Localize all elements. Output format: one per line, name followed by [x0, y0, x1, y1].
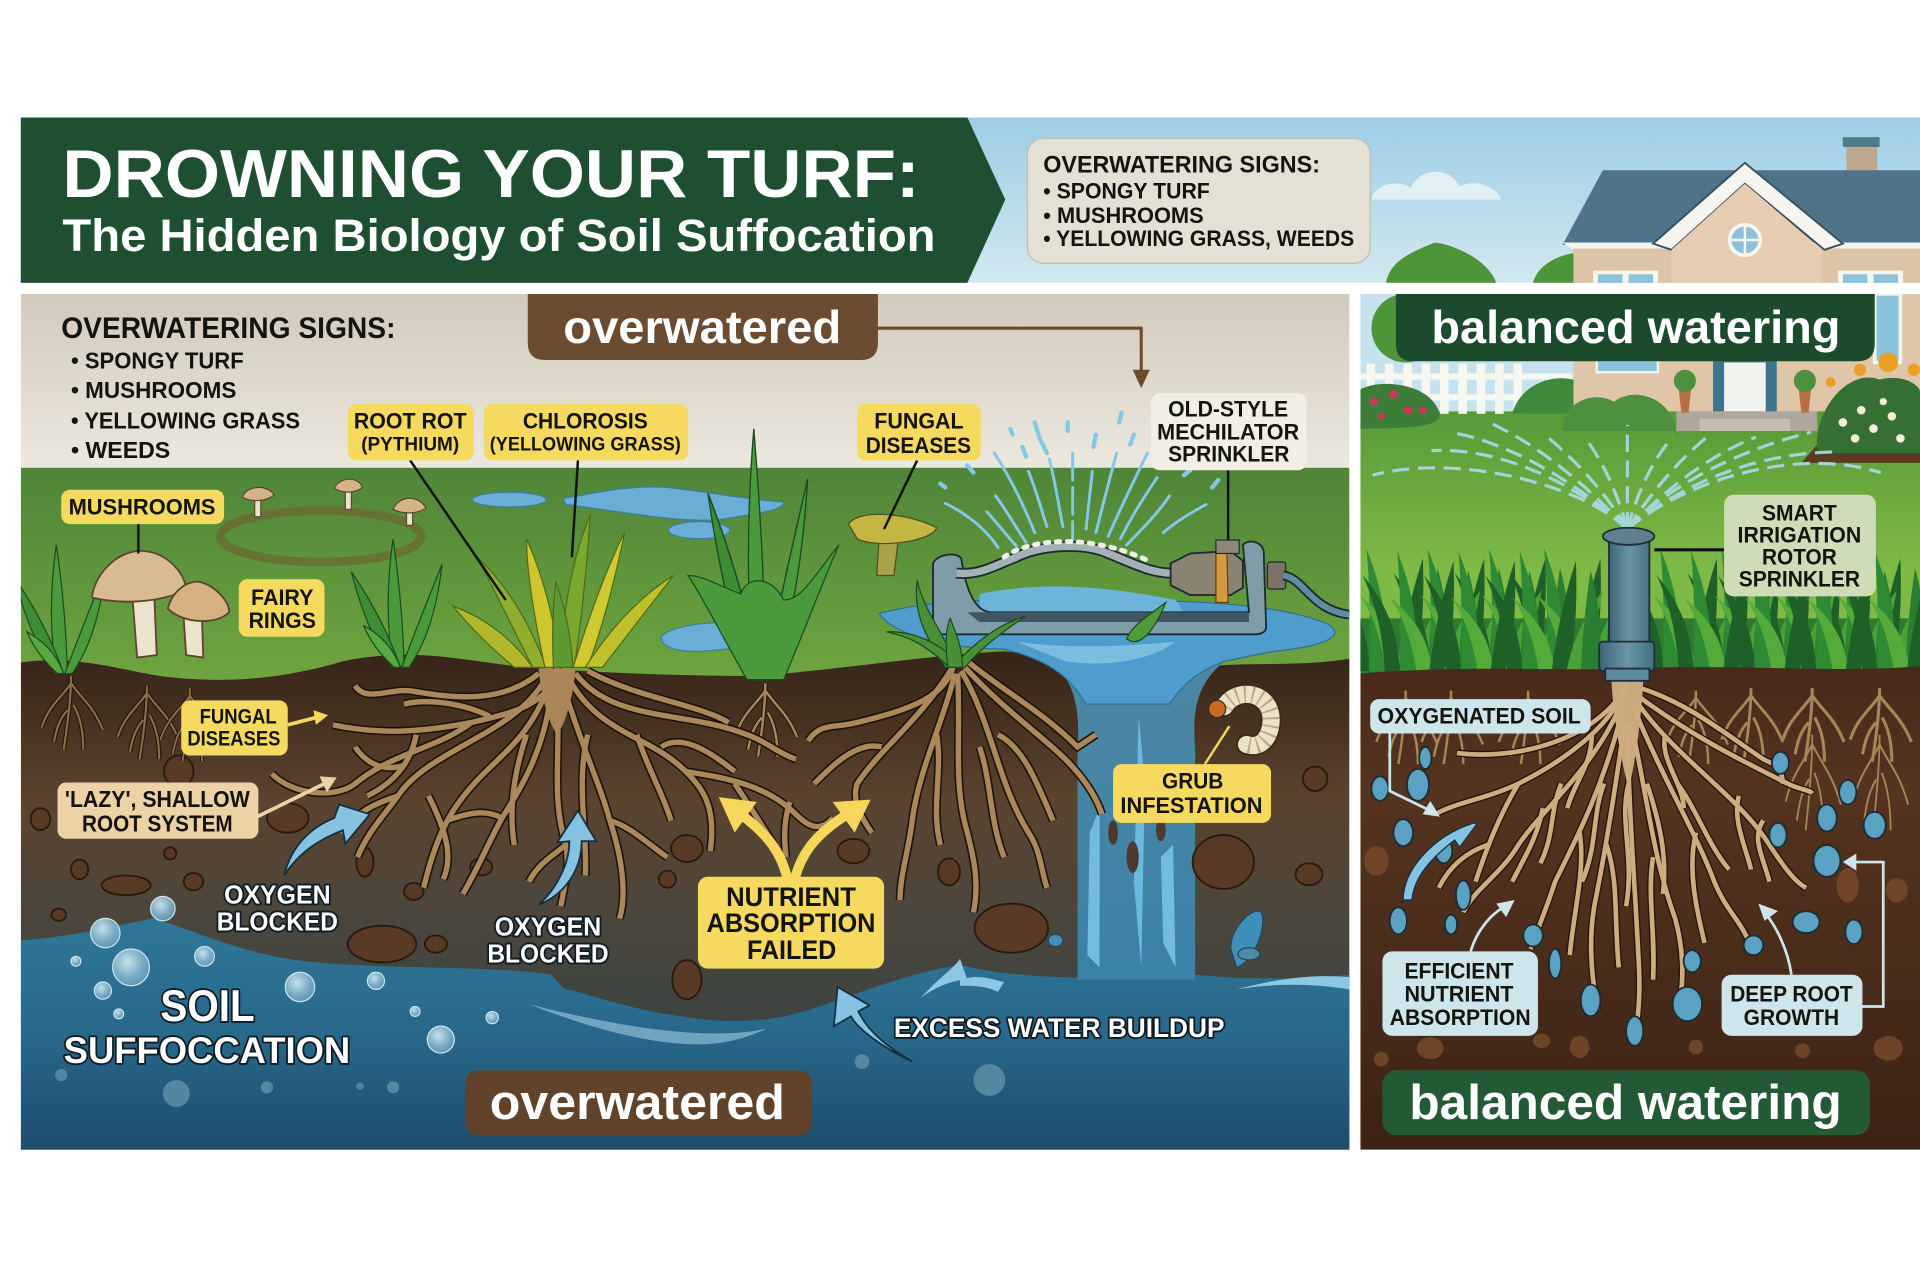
bubbles — [71, 896, 498, 1053]
panel: overwatered scene — [15, 294, 1349, 1150]
label: fairy rings — [239, 579, 324, 637]
arrow: fungal diseases — [288, 710, 328, 725]
arrow: oxygen blocked left — [284, 804, 370, 876]
icon: oscillating sprinkler — [933, 540, 1349, 642]
label: efficient nutrient absorption: NUTRIENT — [1404, 982, 1514, 1007]
title: DROWNING YOUR TURF: — [62, 137, 920, 212]
label: grub infestation — [1113, 764, 1271, 823]
oxygenated soil — [1360, 666, 1920, 1150]
label: soil suffocation: SUFFOCCATION — [64, 1030, 350, 1071]
label: lazy shallow root system — [58, 782, 258, 839]
label: efficient nutrient absorption: EFFICIENT — [1404, 958, 1514, 983]
label: grub infestation: GRUB — [1162, 769, 1223, 794]
panel: header — [21, 118, 1920, 285]
callout: overwatering signs: • MUSHROOMS — [1043, 203, 1204, 228]
lush grass — [1332, 549, 1920, 673]
arrow: overwatered to sprinkler — [878, 328, 1150, 388]
label: fungal diseases top: DISEASES — [866, 433, 971, 458]
callout: overwatering signs: • YELLOWING GRASS, WEEDS — [1043, 226, 1354, 251]
fairy ring — [220, 511, 421, 562]
panel: balanced watering scene — [1332, 294, 1920, 1150]
callout: overwatering signs: • SPONGY TURF — [1043, 178, 1210, 203]
arrow: oxygen flow — [1403, 823, 1477, 900]
leader line: smart sprinkler — [1654, 549, 1724, 551]
deep root system — [1435, 681, 1812, 1022]
icon: fungal mushroom — [849, 514, 937, 576]
callout: overwatering signs: OVERWATERING SIGNS: — [1043, 152, 1320, 179]
house lower floor — [1371, 294, 1920, 416]
arrow: nutrient absorption — [1471, 900, 1515, 951]
grass plants — [15, 429, 839, 680]
water pockets in soil — [1048, 911, 1263, 967]
side roots — [1376, 688, 1911, 830]
label: oxygen blocked center — [487, 914, 609, 968]
label: fungal diseases lower: FUNGAL — [200, 706, 277, 729]
label: oxygenated soil: OXYGENATED SOIL — [1378, 704, 1581, 729]
icon: rotor sprinkler — [1599, 528, 1654, 681]
brown stones — [1364, 846, 1908, 1067]
garden bushes — [1360, 370, 1817, 431]
label: grub infestation: INFESTATION — [1120, 793, 1262, 818]
label: oxygen blocked left: OXYGEN — [224, 882, 331, 910]
leader lines — [138, 460, 1228, 600]
title banner — [21, 118, 1005, 283]
label: old-style sprinkler — [1151, 393, 1307, 470]
label: deep root growth: GROWTH — [1744, 1005, 1839, 1030]
callout: nutrient absorption failed: ABSORPTION — [707, 908, 876, 938]
label: efficient nutrient absorption — [1382, 951, 1538, 1036]
callout: overwatering signs — [1027, 138, 1370, 263]
label: chlorosis — [484, 404, 688, 460]
label: oxygenated soil — [1370, 699, 1591, 733]
standing water around sprinkler — [879, 587, 1335, 704]
label: soil suffocation — [64, 982, 350, 1071]
label: old-style sprinkler: OLD-STYLE — [1168, 396, 1288, 421]
arrow: oxygen blocked center — [539, 811, 596, 905]
label: chlorosis: (YELLOWING GRASS) — [490, 434, 681, 456]
icon: large mushrooms — [92, 551, 229, 658]
label: mushrooms: MUSHROOMS — [69, 494, 216, 519]
heading tag: overwatered bottom: overwatered — [490, 1076, 785, 1130]
label: smart irrigation rotor sprinkler: SPRINKLER — [1739, 567, 1860, 592]
surface puddles — [473, 487, 785, 651]
label: smart irrigation rotor sprinkler: ROTOR — [1762, 544, 1837, 569]
heading tag: balanced watering top — [1396, 294, 1875, 361]
label: root rot: ROOT ROT — [354, 409, 467, 434]
central root system — [272, 667, 833, 918]
label: root rot: (PYTHIUM) — [361, 434, 459, 456]
soil — [21, 651, 1349, 1150]
foreground plant by sprinkler — [887, 580, 1026, 667]
label: lazy shallow root system: 'LAZY', SHALLOW — [65, 786, 250, 812]
label: deep root growth — [1722, 975, 1862, 1036]
label block: overwatering signs — [61, 312, 396, 463]
water pockets — [1371, 747, 1886, 1046]
label: fungal diseases lower — [181, 700, 288, 756]
label block: overwatering signs: • YELLOWING GRASS — [71, 408, 300, 434]
subtitle: The Hidden Biology of Soil Suffocation — [62, 210, 936, 261]
label block: overwatering signs: • WEEDS — [71, 437, 170, 463]
label: old-style sprinkler: MECHILATOR — [1157, 420, 1299, 445]
label: deep root growth: DEEP ROOT — [1730, 982, 1853, 1007]
label block: overwatering signs: OVERWATERING SIGNS: — [61, 312, 396, 345]
arrow: oxygenated soil — [1390, 733, 1440, 817]
label: fungal diseases top — [857, 404, 981, 460]
white fence — [1360, 364, 1572, 414]
waterfall into soil — [1067, 662, 1224, 980]
arrow: excess water — [834, 987, 912, 1062]
infographic canvas — [20, 118, 1920, 1150]
arrow: deep roots — [1758, 904, 1791, 975]
heading tag: balanced watering top: balanced watering — [1431, 301, 1840, 353]
label: excess water buildup: EXCESS WATER BUILDUP — [894, 1013, 1225, 1043]
heading tag: overwatered top: overwatered — [563, 301, 841, 353]
callout: nutrient absorption failed: FAILED — [747, 935, 836, 965]
shallow root system: left plants — [42, 676, 797, 762]
soil stones — [31, 756, 1327, 999]
lawn — [1360, 411, 1920, 673]
label: fairy rings: RINGS — [249, 608, 316, 633]
label: oxygen blocked left — [217, 882, 338, 937]
rotor spray — [1373, 421, 1881, 529]
label: mushrooms — [61, 490, 224, 524]
arrow: deep root to water — [1843, 853, 1883, 1007]
underground water layer — [21, 918, 1349, 1150]
label: smart irrigation rotor sprinkler — [1724, 495, 1876, 596]
label: lazy shallow root system: ROOT SYSTEM — [82, 810, 233, 836]
label: fairy rings: FAIRY — [251, 585, 314, 610]
icon: small mushrooms — [242, 479, 426, 525]
sprinkler water spray — [940, 413, 1218, 547]
label: smart irrigation rotor sprinkler: IRRIGATION — [1738, 522, 1861, 547]
label: fungal diseases top: FUNGAL — [874, 409, 964, 434]
arrow: lazy roots — [257, 776, 337, 817]
heading tag: overwatered bottom — [465, 1070, 812, 1135]
label: fungal diseases lower: DISEASES — [187, 728, 281, 751]
label: soil suffocation: SOIL — [160, 982, 255, 1031]
heading tag: overwatered top — [528, 294, 878, 360]
label block: overwatering signs: • MUSHROOMS — [71, 377, 236, 403]
label: chlorosis: CHLOROSIS — [523, 409, 648, 434]
label block: overwatering signs: • SPONGY TURF — [71, 348, 244, 374]
sprinkler-side root system — [808, 655, 1102, 912]
callout: nutrient absorption failed: NUTRIENT — [726, 882, 856, 912]
arrows: nutrients failing — [719, 797, 871, 879]
label: smart irrigation rotor sprinkler: SMART — [1762, 500, 1837, 525]
flower bed — [1801, 353, 1920, 463]
sky and house scene — [967, 118, 1920, 285]
icon: white grub — [1205, 694, 1271, 764]
label: oxygen blocked left: BLOCKED — [217, 909, 338, 937]
heading tag: balanced watering bottom: balanced watering — [1409, 1076, 1842, 1130]
label: oxygen blocked center: OXYGEN — [495, 914, 601, 942]
label: old-style sprinkler: SPRINKLER — [1168, 442, 1289, 467]
label: root rot — [348, 404, 474, 460]
label: oxygen blocked center: BLOCKED — [487, 940, 609, 968]
label: efficient nutrient absorption: ABSORPTION — [1390, 1005, 1531, 1030]
callout: nutrient absorption failed — [698, 877, 884, 969]
